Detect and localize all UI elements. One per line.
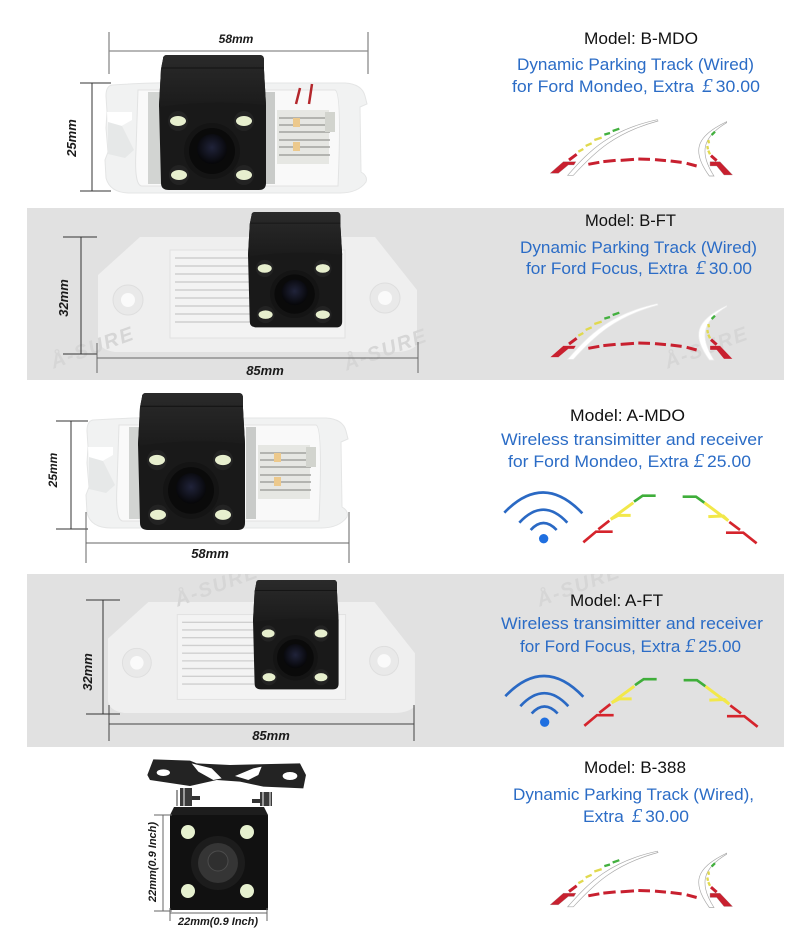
watermarks: Å-SURE (532, 559, 623, 612)
photo: B-FT camera on Focus plate (98, 212, 417, 352)
dimension: width 85mm (109, 705, 414, 743)
photo: A-FT camera on Focus plate (108, 580, 415, 713)
dimension: height 32mm (56, 237, 97, 354)
model text: A-FT: for Ford Focus, Extra £25.00 (520, 635, 741, 657)
model text: B-388 (513, 759, 754, 827)
watermarks: Å-SURE (660, 321, 751, 374)
dimension: height 25mm (64, 83, 111, 191)
model text: B-MDO: Model: B-MDO (584, 30, 698, 48)
dimension: width 85mm: 85mm (252, 728, 290, 743)
model text: B-FT: Model: B-FT (585, 212, 676, 230)
model text: B-FT (520, 212, 757, 279)
icon: parking track (550, 851, 733, 907)
photo: B-388 camera with bracket (147, 759, 306, 910)
icon: parking track (550, 304, 733, 360)
dimension: height 25mm: 25mm (46, 452, 60, 488)
panel: B-MDO row (64, 30, 760, 193)
model text: B-MDO: Dynamic Parking Track (Wired) (517, 55, 754, 74)
model text: A-MDO: for Ford Mondeo, Extra £25.00 (508, 450, 751, 472)
panel: B-388 row (147, 759, 754, 928)
icon: parking track (550, 120, 733, 176)
model text: A-FT: Model: A-FT (570, 592, 663, 610)
dimension: height 32mm: 32mm (80, 653, 95, 691)
dimension: height 25mm (46, 421, 88, 529)
icon: wifi and wireless track lines (504, 492, 757, 543)
model text: A-FT: Wireless transimitter and receiver (501, 614, 763, 633)
dimension: width 22mm (170, 908, 267, 928)
panel: A-MDO row (46, 393, 763, 563)
model text: A-FT (501, 592, 763, 657)
dimension: width 85mm (97, 342, 418, 378)
dimension: height 22mm (147, 815, 172, 911)
model text: B-388: Dynamic Parking Track (Wired), (513, 785, 754, 804)
model text: B-MDO: for Ford Mondeo, Extra £30.00 (512, 75, 760, 97)
dimension: width 58mm (86, 512, 349, 563)
model text: B-388: Extra £30.00 (583, 805, 689, 827)
photo: B-MDO camera on Mondeo plate (105, 55, 367, 193)
dimension: height 22mm: 22mm(0.9 Inch) (147, 822, 159, 903)
model text: A-MDO (501, 407, 763, 472)
dimension: width 58mm: 58mm (191, 546, 229, 561)
panel: A-FT row (27, 559, 784, 747)
photo: A-MDO camera on Mondeo plate (86, 393, 348, 530)
dimension: height 25mm: 25mm (64, 119, 79, 158)
dimension: height 32mm (80, 600, 120, 714)
model text: B-388: Model: B-388 (584, 759, 686, 777)
panel: B-FT row (27, 208, 784, 380)
dimension: width 22mm: 22mm(0.9 Inch) (177, 916, 258, 928)
panel background (27, 208, 784, 380)
watermarks: Å-SURE (46, 321, 137, 374)
watermarks: Å-SURE (170, 559, 261, 612)
model text: B-FT: Dynamic Parking Track (Wired) (520, 238, 757, 257)
dimension: width 58mm: 58mm (219, 32, 254, 46)
dimension: width 85mm: 85mm (246, 363, 284, 378)
icon: wifi and wireless track lines (505, 676, 758, 727)
watermarks (177, 574, 618, 607)
dimension: width 58mm (109, 32, 368, 74)
model text: B-MDO (512, 30, 760, 97)
panel background (27, 574, 784, 747)
model text: A-MDO: Model: A-MDO (570, 407, 685, 425)
model text: A-MDO: Wireless transimitter and receiver (501, 430, 763, 449)
model text: B-FT: for Ford Focus, Extra £30.00 (526, 257, 752, 279)
watermarks (54, 326, 746, 370)
dimension: height 32mm: 32mm (56, 279, 71, 317)
watermarks: Å-SURE (339, 323, 430, 376)
